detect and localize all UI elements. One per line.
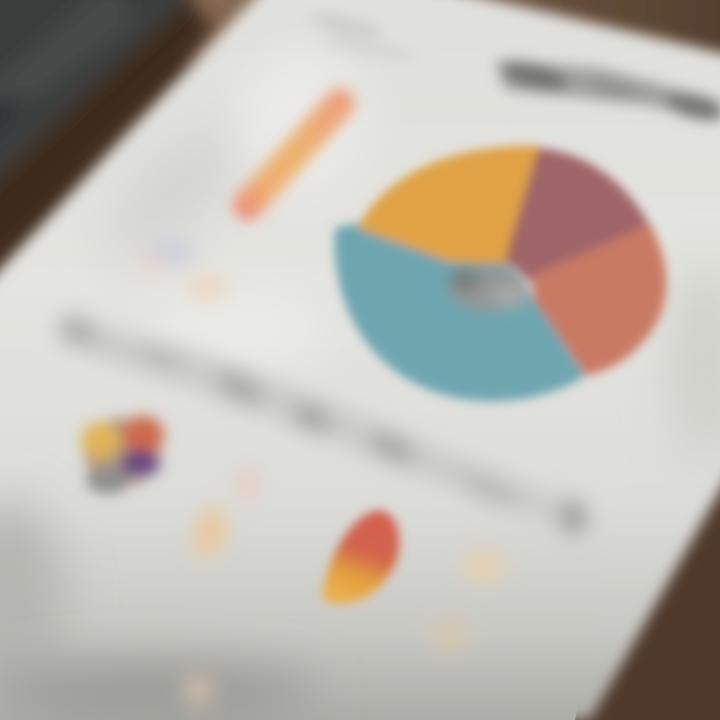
small legend under the bar bbox=[136, 239, 229, 299]
pie centre: grey hub bbox=[448, 266, 528, 310]
orange and red teardrop icon bbox=[322, 510, 399, 604]
pie base and teal segment bbox=[335, 222, 585, 401]
orange vertical bar bbox=[248, 103, 340, 205]
pie segment: salmon bbox=[532, 224, 666, 376]
pie segment: mauve bbox=[505, 148, 650, 285]
blurred subheading band across the page bbox=[55, 311, 590, 535]
pie chart bbox=[335, 146, 666, 401]
heading: dark blurred title at top right bbox=[495, 56, 720, 125]
pie segment: yellow bbox=[357, 146, 540, 264]
small pale orange icon bbox=[190, 468, 258, 560]
keyboard at top left bbox=[0, 0, 190, 180]
pale lower right icons bbox=[184, 551, 504, 706]
small multicolour pie icon bbox=[81, 416, 164, 494]
small heading at top of the sheet bbox=[314, 14, 391, 55]
